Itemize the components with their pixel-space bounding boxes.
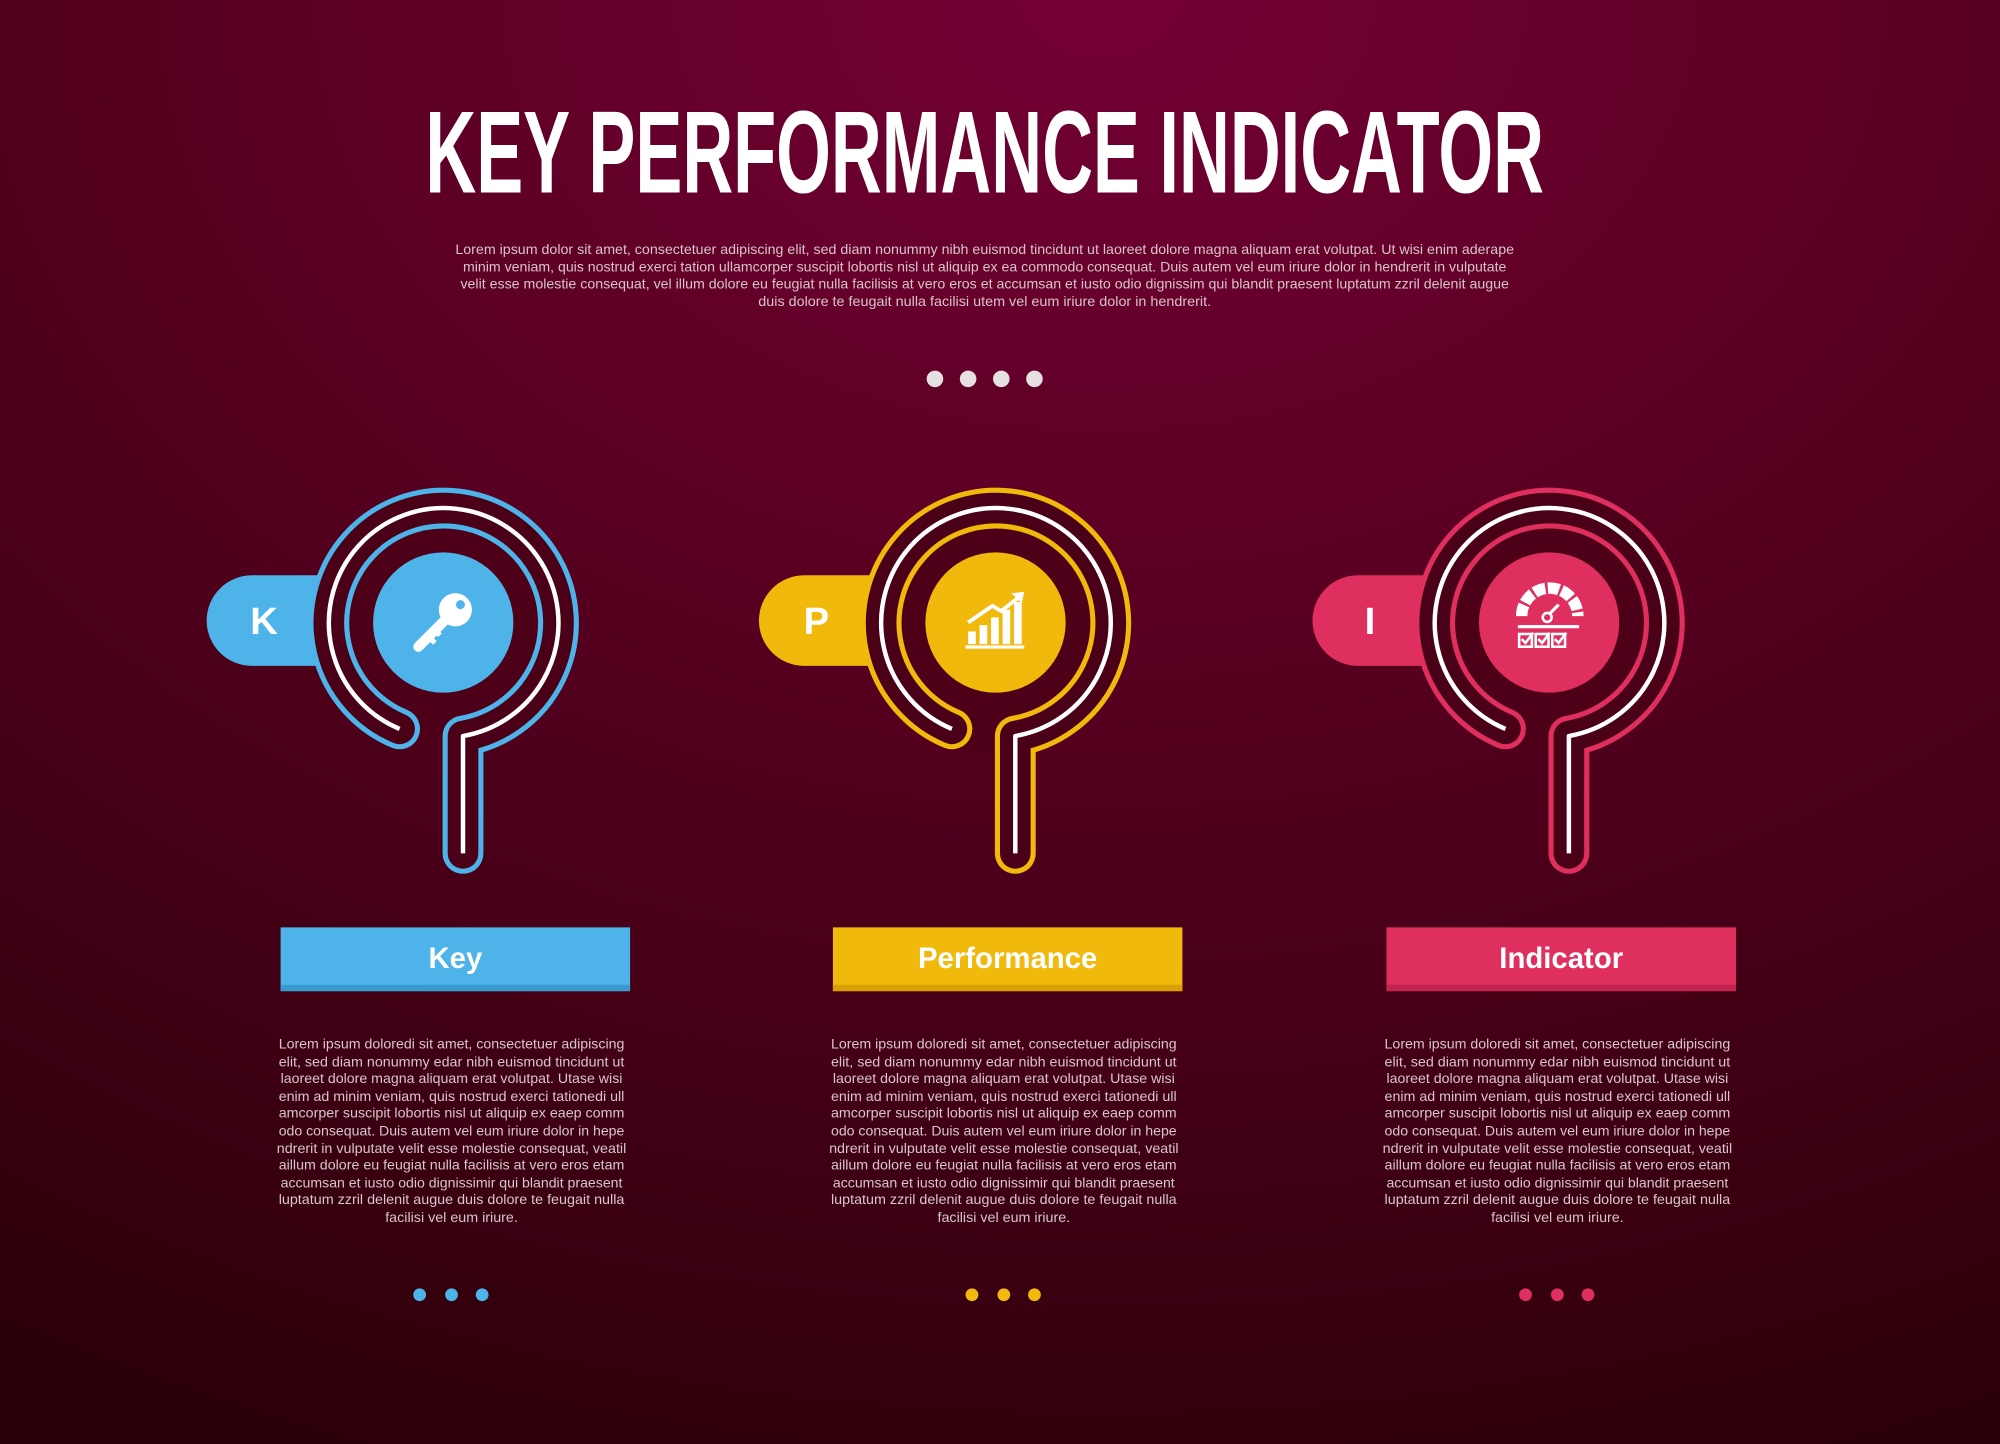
text block: Performance: odo consequat. Duis autem vel eum iriure dolor in hepe xyxy=(831,1122,1177,1138)
dots: Key xyxy=(413,1288,489,1301)
panel: Performance xyxy=(759,491,1182,1301)
text block: Indicator: Lorem ipsum doloredi sit amet, consectetuer adipiscing xyxy=(1385,1036,1730,1052)
text block: Performance: enim ad minim veniam, quis nostrud exerci tationedi ull xyxy=(831,1088,1177,1104)
text block: Performance: Lorem ipsum doloredi sit amet, consectetuer adipiscing xyxy=(831,1036,1177,1052)
icon: key xyxy=(373,552,513,693)
text block: Key: elit, sed diam nonummy edar nibh euismod tincidunt ut xyxy=(279,1053,624,1069)
subtitle text: minim veniam, quis nostrud exerci tation ullamcorper suscipit lobortis nisl ut aliquip ex ea commodo consequat. Duis autem vel eum iriure dolor in hendrerit in vulputate xyxy=(463,260,1507,275)
pill: P: P xyxy=(804,600,829,643)
text block: Performance: luptatum zzril delenit augue duis dolore te feugait nulla xyxy=(831,1191,1177,1207)
text block: Indicator xyxy=(1383,1036,1732,1225)
top dots xyxy=(927,371,1043,387)
subtitle text: duis dolore te feugait nulla facilisi utem vel eum iriure dolor in hendrerit. xyxy=(758,294,1211,309)
text block: Key: Lorem ipsum doloredi sit amet, consectetuer adipiscing xyxy=(279,1036,624,1052)
subtitle text: Lorem ipsum dolor sit amet, consectetuer adipiscing elit, sed diam nonummy nibh euismod tincidunt ut laoreet dolore magna aliquam erat volutpat. Ut wisi enim aderape xyxy=(455,242,1514,257)
text block: Indicator: enim ad minim veniam, quis nostrud exerci tationedi ull xyxy=(1385,1088,1730,1104)
ring: P xyxy=(865,491,1128,853)
subtitle text xyxy=(455,242,1514,309)
text block: Performance: laoreet dolore magna aliquam erat volutpat. Utase wisi xyxy=(833,1070,1175,1086)
text block: Indicator: ndrerit in vulputate velit esse molestie consequat, veatil xyxy=(1383,1140,1732,1156)
text block: Performance: accumsan et iusto odio dignissimir qui blandit praesent xyxy=(833,1175,1175,1191)
text block: Key: accumsan et iusto odio dignissimir qui blandit praesent xyxy=(281,1175,623,1191)
text block: Key xyxy=(277,1036,626,1225)
text block: Indicator: facilisi vel eum iriure. xyxy=(1491,1209,1624,1225)
text block: Performance: ndrerit in vulputate velit esse molestie consequat, veatil xyxy=(829,1140,1179,1156)
text block: Key: facilisi vel eum iriure. xyxy=(385,1209,518,1225)
text block: Indicator: aillum dolore eu feugiat nulla facilisis at vero eros etam xyxy=(1385,1157,1730,1173)
icon: growth chart xyxy=(925,552,1066,693)
text block: Indicator: luptatum zzril delenit augue duis dolore te feugait nulla xyxy=(1385,1191,1730,1207)
text block: Key: aillum dolore eu feugiat nulla facilisis at vero eros etam xyxy=(279,1157,624,1173)
panel: Key xyxy=(207,491,630,1301)
text block: Key: ndrerit in vulputate velit esse molestie consequat, veatil xyxy=(277,1140,626,1156)
text block: Indicator: laoreet dolore magna aliquam erat volutpat. Utase wisi xyxy=(1386,1070,1728,1086)
panel: Indicator xyxy=(1312,491,1736,1301)
text block: Key: enim ad minim veniam, quis nostrud exerci tationedi ull xyxy=(279,1088,624,1104)
pill: I xyxy=(1312,575,1504,666)
text block: Key: luptatum zzril delenit augue duis dolore te feugait nulla xyxy=(279,1191,625,1207)
label bar: Performance xyxy=(833,927,1182,991)
label bar: Key xyxy=(281,927,630,991)
text block: Indicator: accumsan et iusto odio dignissimir qui blandit praesent xyxy=(1386,1175,1728,1191)
dots: Performance xyxy=(966,1288,1041,1301)
pill: K xyxy=(207,575,398,666)
text block: Indicator: elit, sed diam nonummy edar nibh euismod tincidunt ut xyxy=(1385,1053,1730,1069)
label bar: Key: Key xyxy=(428,942,483,975)
text block: Indicator: amcorper suscipit lobortis nisl ut aliquip ex eaep comm xyxy=(1385,1104,1730,1120)
text block: Performance: facilisi vel eum iriure. xyxy=(937,1209,1070,1225)
pill: K: K xyxy=(250,600,278,643)
ring: I xyxy=(1418,491,1681,853)
text block: Performance xyxy=(829,1036,1179,1225)
pill: I: I xyxy=(1365,600,1375,643)
pill: P xyxy=(759,575,950,666)
subtitle text: velit esse molestie consequat, vel illum dolore eu feugiat nulla facilisis at vero eros et accumsan et iusto odio dignissim qui blandit praesent luptatum zzril delenit augue xyxy=(460,276,1509,291)
text block: Indicator: odo consequat. Duis autem vel eum iriure dolor in hepe xyxy=(1385,1122,1730,1138)
icon: gauge xyxy=(1479,552,1619,693)
text block: Performance: aillum dolore eu feugiat nulla facilisis at vero eros etam xyxy=(831,1157,1177,1173)
dots: Indicator xyxy=(1519,1288,1594,1301)
label bar: Indicator: Indicator xyxy=(1499,942,1623,975)
text block: Performance: amcorper suscipit lobortis nisl ut aliquip ex eaep comm xyxy=(831,1104,1177,1120)
label bar: Performance: Performance xyxy=(918,942,1097,975)
text block: Key: amcorper suscipit lobortis nisl ut aliquip ex eaep comm xyxy=(279,1104,624,1120)
text block: Key: odo consequat. Duis autem vel eum iriure dolor in hepe xyxy=(279,1122,625,1138)
label bar: Indicator xyxy=(1386,927,1736,991)
text block: Key: laoreet dolore magna aliquam erat volutpat. Utase wisi xyxy=(281,1070,622,1086)
ring: K xyxy=(312,491,575,853)
text block: Performance: elit, sed diam nonummy edar nibh euismod tincidunt ut xyxy=(831,1053,1177,1069)
